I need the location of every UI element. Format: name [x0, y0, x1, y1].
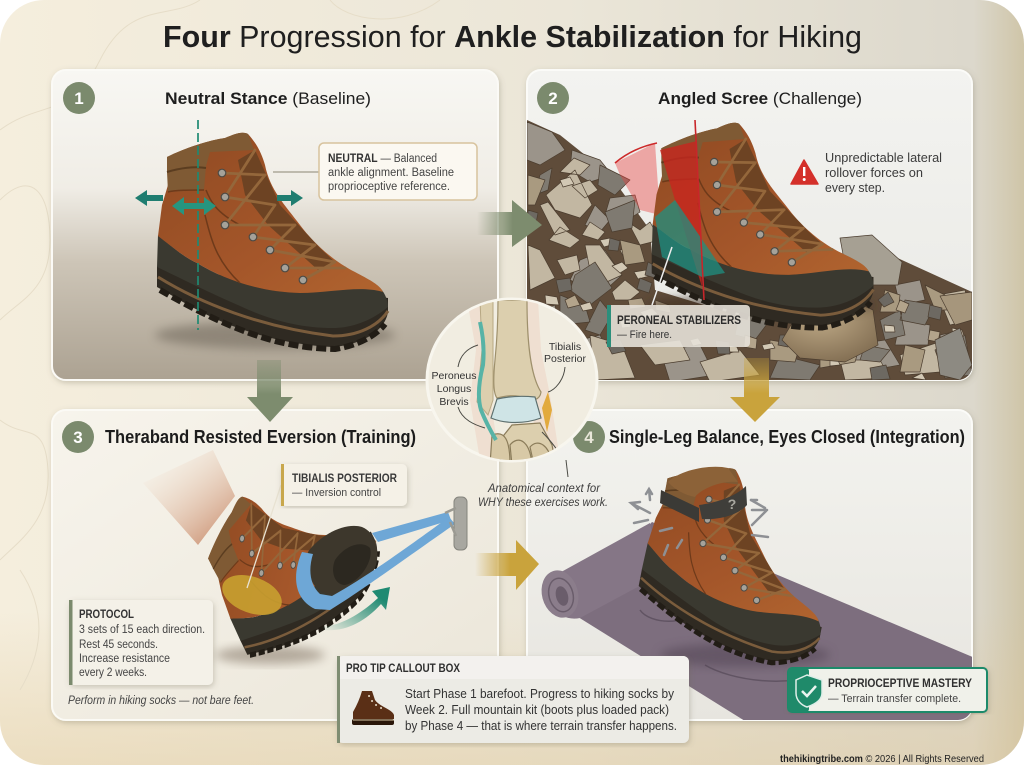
instability arrows [631, 489, 768, 555]
warning text: rollover forces on [825, 165, 923, 180]
mastery badge: — Terrain transfer complete. [828, 693, 961, 705]
anatomy caption: WHY these exercises work. [478, 495, 608, 509]
scree rocks [527, 120, 972, 382]
arrow: panel 3 to 4 [475, 540, 539, 590]
number badge 2 [537, 82, 569, 114]
label: peroneus: Longus [437, 383, 471, 395]
icon: boot [352, 691, 394, 725]
large rocks [840, 235, 902, 285]
label: tibialis [544, 341, 587, 365]
anatomy caption: Anatomical context for [487, 481, 601, 495]
tibialis posterior label: TIBIALIS POSTERIOR [292, 471, 397, 485]
number badge 1 [63, 82, 95, 114]
boot: balance [629, 457, 848, 670]
heading 1: Neutral Stance (Baseline) [165, 89, 371, 108]
boot: theraband [195, 416, 388, 698]
mastery badge [788, 668, 987, 712]
callout: neutral: NEUTRAL — Balanced [328, 153, 437, 165]
number badge 3 [62, 421, 94, 453]
mastery badge: PROPRIOCEPTIVE MASTERY [828, 676, 972, 690]
warning text [825, 150, 942, 195]
fan arc [615, 143, 657, 163]
panel 1 background [52, 70, 498, 380]
yoga mat [536, 522, 975, 721]
panel 4 background [527, 410, 972, 720]
peroneal stabilizers label: PERONEAL STABILIZERS [617, 313, 741, 327]
protocol box: PROTOCOL [79, 607, 134, 621]
tibialis posterior label [281, 464, 407, 506]
label: tibialis: Posterior [544, 353, 587, 365]
label: peroneus: Peroneus [432, 370, 476, 382]
peroneal stabilizers label [607, 305, 750, 347]
heading 4: Single-Leg Balance, Eyes Closed (Integration) [609, 427, 965, 447]
resistance band [296, 512, 455, 610]
panel 3 background [52, 410, 498, 720]
leader line [247, 485, 281, 588]
protocol box [69, 600, 213, 685]
overlays: red and teal muscle zones [655, 120, 725, 300]
blindfold with question mark [660, 486, 747, 522]
leader line to peroneal label [652, 247, 672, 305]
warning text: every step. [825, 180, 885, 195]
arrow: panel 1 to 3 [247, 360, 293, 422]
title: Four Progression for Ankle Stabilization for Hiking [163, 19, 862, 54]
alignment line [197, 120, 199, 330]
protocol box: Increase resistance [79, 653, 170, 665]
panel: single-leg balance [527, 410, 987, 721]
anatomy circle [427, 299, 597, 477]
callout: neutral: ankle alignment. Baseline [328, 167, 454, 179]
tip text: Start Phase 1 barefoot. Progress to hiking socks by [405, 686, 674, 701]
label: peroneus [432, 370, 476, 408]
heading 2: Angled Scree (Challenge) [658, 89, 862, 108]
gold muscle highlight [217, 567, 287, 623]
callout: neutral [319, 143, 477, 200]
arrows: lateral balance [135, 190, 303, 215]
callout: neutral: proprioceptive reference. [328, 181, 450, 193]
green motion arrow [322, 587, 390, 630]
tip text: Week 2. Full mountain kit (boots plus loaded pack) [405, 702, 669, 717]
heading 3: Theraband Resisted Eversion (Training) [105, 427, 416, 447]
number badge 3: 3 [73, 428, 83, 447]
icon: warning triangle [791, 160, 818, 184]
panel 2 background [527, 70, 972, 380]
anatomy caption [478, 481, 608, 509]
panel: angled scree [527, 70, 972, 382]
number badge 2: 2 [548, 89, 558, 108]
pro tip callout [337, 656, 689, 743]
warning text: Unpredictable lateral [825, 150, 942, 165]
leg [143, 450, 235, 545]
number badge 4: 4 [584, 428, 594, 447]
pro tip callout: PRO TIP CALLOUT BOX [346, 661, 460, 675]
callout connector [273, 171, 319, 173]
label: peroneus: Brevis [439, 396, 469, 408]
boot: neutral [155, 133, 395, 349]
tip text: by Phase 4 — that is where terrain transfer happens. [405, 718, 677, 733]
protocol box: 3 sets of 15 each direction. [79, 624, 205, 636]
callout header [337, 656, 689, 679]
arrow: panel 2 to 4 [730, 358, 780, 422]
panel: theraband resisted eversion [52, 410, 498, 720]
boot: angled [645, 118, 875, 333]
context leader line [566, 460, 568, 477]
blindfold with question mark: ? [728, 496, 736, 512]
icon: shield check [796, 675, 822, 707]
tip text [405, 686, 677, 733]
note: Perform in hiking socks — not bare feet. [68, 695, 254, 707]
protocol box: every 2 weeks. [79, 667, 147, 679]
footer: thehikingtribe.com © 2026 | All Rights Reserved [780, 753, 984, 765]
protocol box: Rest 45 seconds. [79, 639, 158, 651]
label: tibialis: Tibialis [549, 341, 581, 353]
number badge 1: 1 [74, 89, 84, 108]
number badge 4 [573, 421, 605, 453]
wall anchor [445, 497, 467, 550]
tibialis posterior label: — Inversion control [292, 487, 381, 499]
red tilt angle fan [615, 143, 660, 215]
arrow: panel 1 to 2 [477, 200, 542, 247]
ankle anatomy drawing [458, 300, 566, 460]
panel: neutral stance [52, 70, 498, 380]
peroneal stabilizers label: — Fire here. [617, 329, 672, 341]
